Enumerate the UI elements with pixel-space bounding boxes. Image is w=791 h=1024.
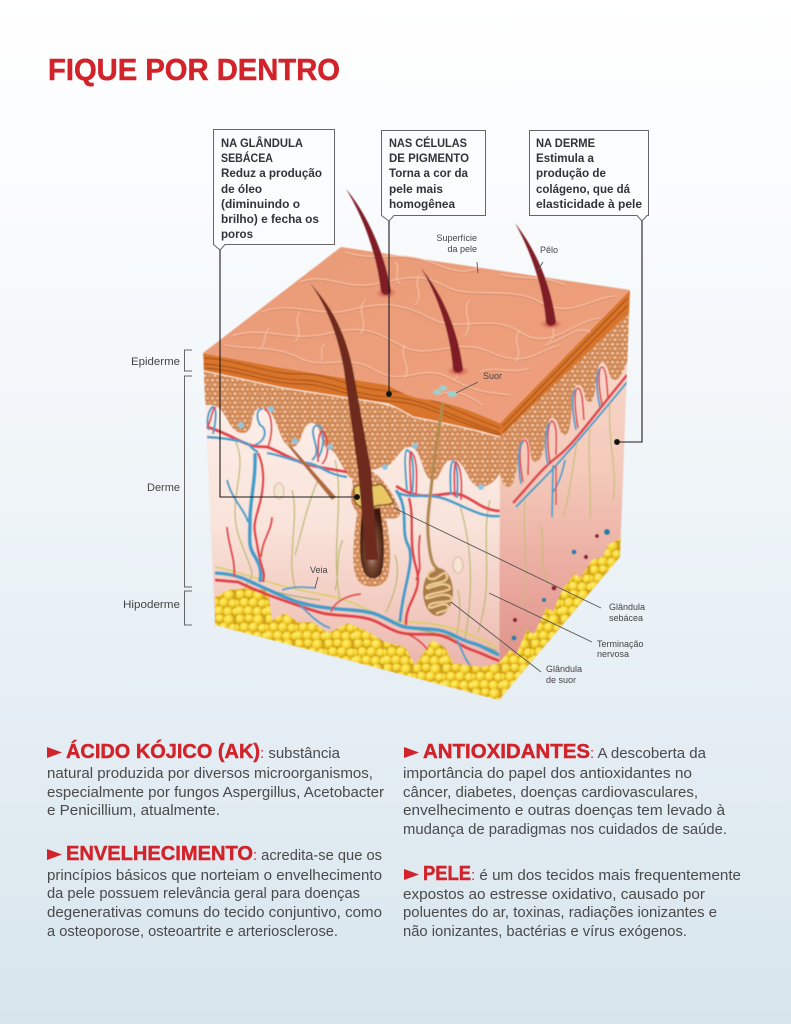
text block: pele (403, 862, 741, 940)
callout: células de pigmento: Torna a cor da (389, 166, 468, 180)
vessels lower plexus (215, 567, 500, 665)
anatomy labels: Pêlo (540, 245, 558, 255)
anatomy labels: Suor (483, 371, 502, 381)
hair follicle (350, 470, 400, 587)
right face (499, 290, 630, 700)
text block: envelhecimento: : acredita-se que os (253, 848, 382, 864)
anatomy labels (310, 233, 645, 685)
callout: células de pigmento: homogênea (389, 197, 455, 211)
anatomy labels: Glândula (546, 664, 582, 674)
text block: antioxidantes: envelhecimento e outras doenças tem levado à (403, 803, 726, 819)
sebaceous gland (354, 484, 394, 509)
anatomy labels: Veia (310, 565, 328, 575)
callout: derme: Estimula a (536, 151, 594, 165)
anatomy labels: Terminação (597, 639, 644, 649)
callout: glândula sebácea: brilho) e fecha os (221, 212, 319, 226)
pointer lines (220, 221, 642, 499)
leader lines (315, 262, 601, 672)
illustration: skin cross-section cube (203, 189, 630, 702)
layer labels and brackets: Epiderme (131, 356, 180, 368)
hair 2 (421, 268, 463, 373)
hair 3 (515, 223, 556, 326)
text block: envelhecimento: princípios básicos que norteiam o envelhecimento (47, 868, 382, 884)
callout: glândula sebácea: NA GLÂNDULA (221, 135, 303, 150)
callout: derme: produção de (536, 166, 606, 180)
text block: pele: expostos ao estresse oxidativo, causado por (403, 887, 705, 903)
callout: glândula sebácea (214, 130, 334, 250)
anatomy labels: Glândula (609, 602, 645, 612)
text block: antioxidantes: ANTIOXIDANTES (423, 740, 590, 763)
text block: antioxidantes: câncer, diabetes, doenças cardiovasculares, (403, 785, 698, 801)
callout: células de pigmento: NAS CÉLULAS (389, 135, 467, 150)
text block: antioxidantes: mudança de paradigmas nos cuidados de saúde. (403, 822, 727, 838)
hair bulb (360, 508, 384, 578)
vessel cross-section dots (512, 529, 610, 640)
anatomy labels: nervosa (597, 649, 629, 659)
receptor tips (238, 406, 484, 490)
fat layer (215, 588, 500, 702)
front face (203, 353, 500, 702)
anatomy labels: sebácea (609, 613, 643, 623)
callout: células de pigmento (382, 130, 486, 221)
callout: glândula sebácea: (diminuindo o (221, 197, 300, 211)
callout: células de pigmento: DE PIGMENTO (389, 151, 469, 165)
hair 1 (346, 189, 391, 295)
callout: glândula sebácea: SEBÁCEA (221, 150, 273, 165)
text block: envelhecimento: degenerativas comuns do tecido conjuntivo, como (47, 905, 382, 921)
text block: ácido kójico: natural produzida por diversos microorganismos, (47, 766, 373, 782)
text block: envelhecimento: a osteoporose, osteoartrite e arteriosclerose. (47, 924, 338, 940)
callout: glândula sebácea: poros (221, 227, 253, 241)
text block: pele: não ionizantes, bactérias e vírus exógenos. (403, 924, 687, 940)
layer labels and brackets: Hipoderme (123, 599, 180, 611)
callout: derme: colágeno, que dá (536, 182, 630, 196)
text block: pele: PELE (423, 862, 471, 885)
layer labels and brackets (123, 350, 192, 625)
text block: envelhecimento: ENVELHECIMENTO (66, 842, 253, 865)
text block: antioxidantes: importância do papel dos antioxidantes no (403, 766, 692, 782)
cell layer (203, 365, 500, 487)
callout: glândula sebácea: Reduz a produção (221, 166, 322, 180)
callout: derme: elasticidade à pele (536, 197, 642, 211)
epidermis band (203, 353, 500, 437)
callout: glândula sebácea: de óleo (221, 182, 262, 196)
text block: ácido kójico: e Penicillium, atualmente. (47, 803, 220, 819)
callout: derme (530, 130, 648, 221)
text block: envelhecimento (47, 842, 382, 940)
title: FIQUE POR DENTRO (48, 52, 340, 87)
anatomy labels: de suor (546, 675, 576, 685)
vessels upper (207, 407, 500, 625)
text block: ácido kójico: : substância (260, 746, 341, 762)
anatomy labels: Superfície (436, 233, 477, 243)
text block: envelhecimento: da pele possuem relevância geral para doenças (47, 886, 360, 902)
text block: ácido kójico (47, 739, 384, 819)
layer labels and brackets: Derme (147, 482, 180, 494)
text block: pele: poluentes do ar, toxinas, radiações ionizantes e (403, 905, 717, 921)
text block: ácido kójico: especialmente por fungos Aspergillus, Acetobacter (47, 785, 384, 801)
top face (203, 247, 630, 423)
text block: antioxidantes: : A descoberta da (590, 746, 707, 762)
anatomy labels: da pele (447, 244, 477, 254)
callout: derme: NA DERME (536, 136, 595, 150)
arrector pili muscle (288, 446, 336, 500)
callout: células de pigmento: pele mais (389, 182, 443, 196)
nerves (235, 440, 490, 640)
text block: pele: : é um dos tecidos mais frequentemente (471, 868, 741, 884)
sweat duct (428, 397, 444, 570)
hair main shaft (310, 283, 378, 560)
sweat droplets (433, 385, 457, 397)
text block: ácido kójico: ÁCIDO KÓJICO (AK) (66, 739, 260, 763)
text block: antioxidantes (403, 740, 727, 838)
sweat gland (423, 568, 453, 616)
